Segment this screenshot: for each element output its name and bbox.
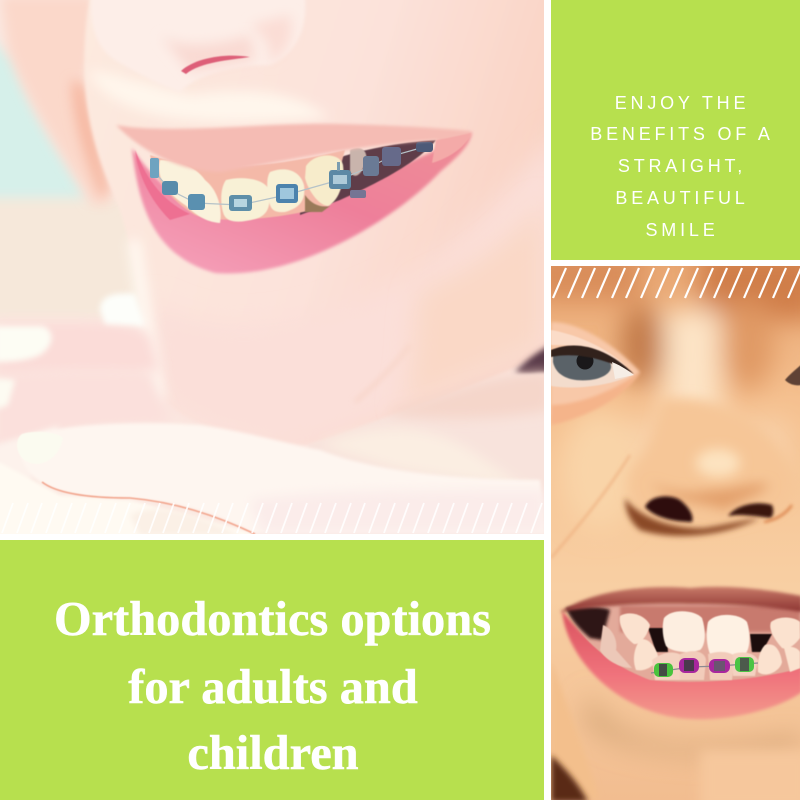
lower lip [562,610,800,719]
title: children [187,727,359,780]
nose [625,398,794,536]
gum and dark gaps [566,606,800,652]
title [54,593,491,780]
lower hand [0,372,560,540]
right eye corner [785,364,800,385]
tagline text: BENEFITS OF A [590,124,774,144]
jaw and chin shading [128,146,544,420]
title: Orthodontics options [54,593,491,646]
tagline text [590,93,774,240]
face [84,0,544,378]
nose [91,0,305,92]
teeth [600,611,800,680]
upper lip [560,587,800,612]
dark gap at right edge [512,343,544,376]
tagline text: ENJOY THE [615,93,749,113]
tagline text: BEAUTIFUL [615,188,749,208]
background fingers [0,292,160,437]
photo: child smile with coloured braces [551,266,800,800]
tagline text: STRAIGHT, [618,156,746,176]
lower lip [132,132,472,274]
coloured braces [651,657,758,677]
lip corner [432,133,471,163]
upper lip [116,124,471,172]
mouth interior [566,603,800,682]
photo: adult smile with metal braces [0,0,560,540]
title: for adults and [128,661,418,714]
cheek fold [551,455,630,558]
cheek [0,0,110,205]
hatch overlay [2,503,542,533]
teeth [159,148,366,223]
forehead and brow shading [551,266,800,521]
mouth interior [135,140,436,220]
hatch overlay [553,268,800,298]
panel: title block [0,540,544,800]
tagline text: SMILE [645,220,719,240]
philtrum highlight [98,75,320,123]
panel: tagline block [551,0,800,260]
eye [551,322,640,425]
nostril [181,56,250,74]
blurred background [0,42,85,205]
chin and jaw shading [551,660,800,800]
braces [150,142,433,211]
